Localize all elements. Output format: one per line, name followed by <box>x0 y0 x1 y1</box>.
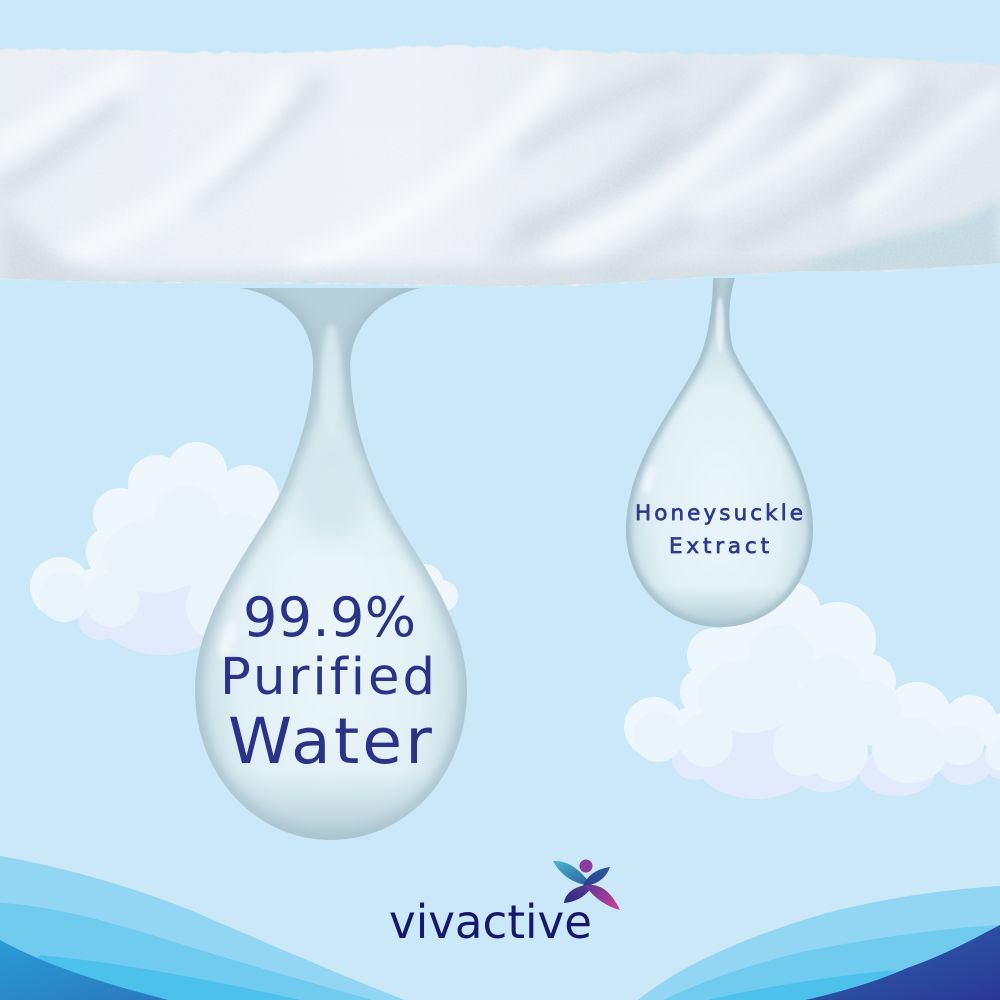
label: 99.9% purified water: Water <box>228 705 435 778</box>
water drop: honeysuckle extract <box>626 278 813 627</box>
label: honeysuckle extract <box>635 501 803 559</box>
cotton band <box>0 40 1000 300</box>
logo: vivactive <box>389 860 620 949</box>
label: 99.9% purified water: Purified <box>220 648 438 707</box>
logo wordmark: vivactive <box>389 895 592 949</box>
label: honeysuckle extract: Honeysuckle <box>635 501 803 526</box>
waves: bottom right <box>638 886 1000 1000</box>
label: 99.9% purified water: 99.9% <box>243 586 416 649</box>
label: honeysuckle extract: Extract <box>669 534 769 559</box>
cloud: left <box>30 442 458 655</box>
label: 99.9% purified water <box>220 586 438 778</box>
logo icon: figure <box>553 860 620 910</box>
water drop: purified water <box>195 288 467 840</box>
waves: bottom left <box>0 856 405 1000</box>
cloud: right <box>624 582 1000 799</box>
